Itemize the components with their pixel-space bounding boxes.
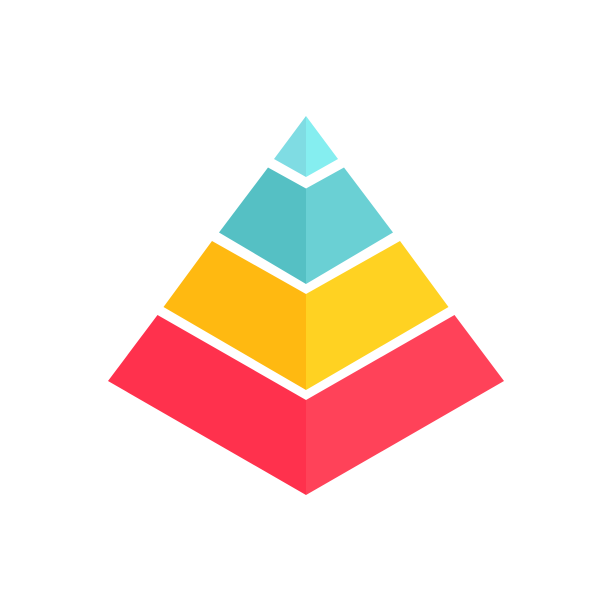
tier 4: red base xyxy=(108,315,504,495)
tier 2: teal band xyxy=(219,168,393,284)
tier 3: yellow band xyxy=(164,241,448,390)
tier 1: top cyan cap xyxy=(274,116,338,177)
